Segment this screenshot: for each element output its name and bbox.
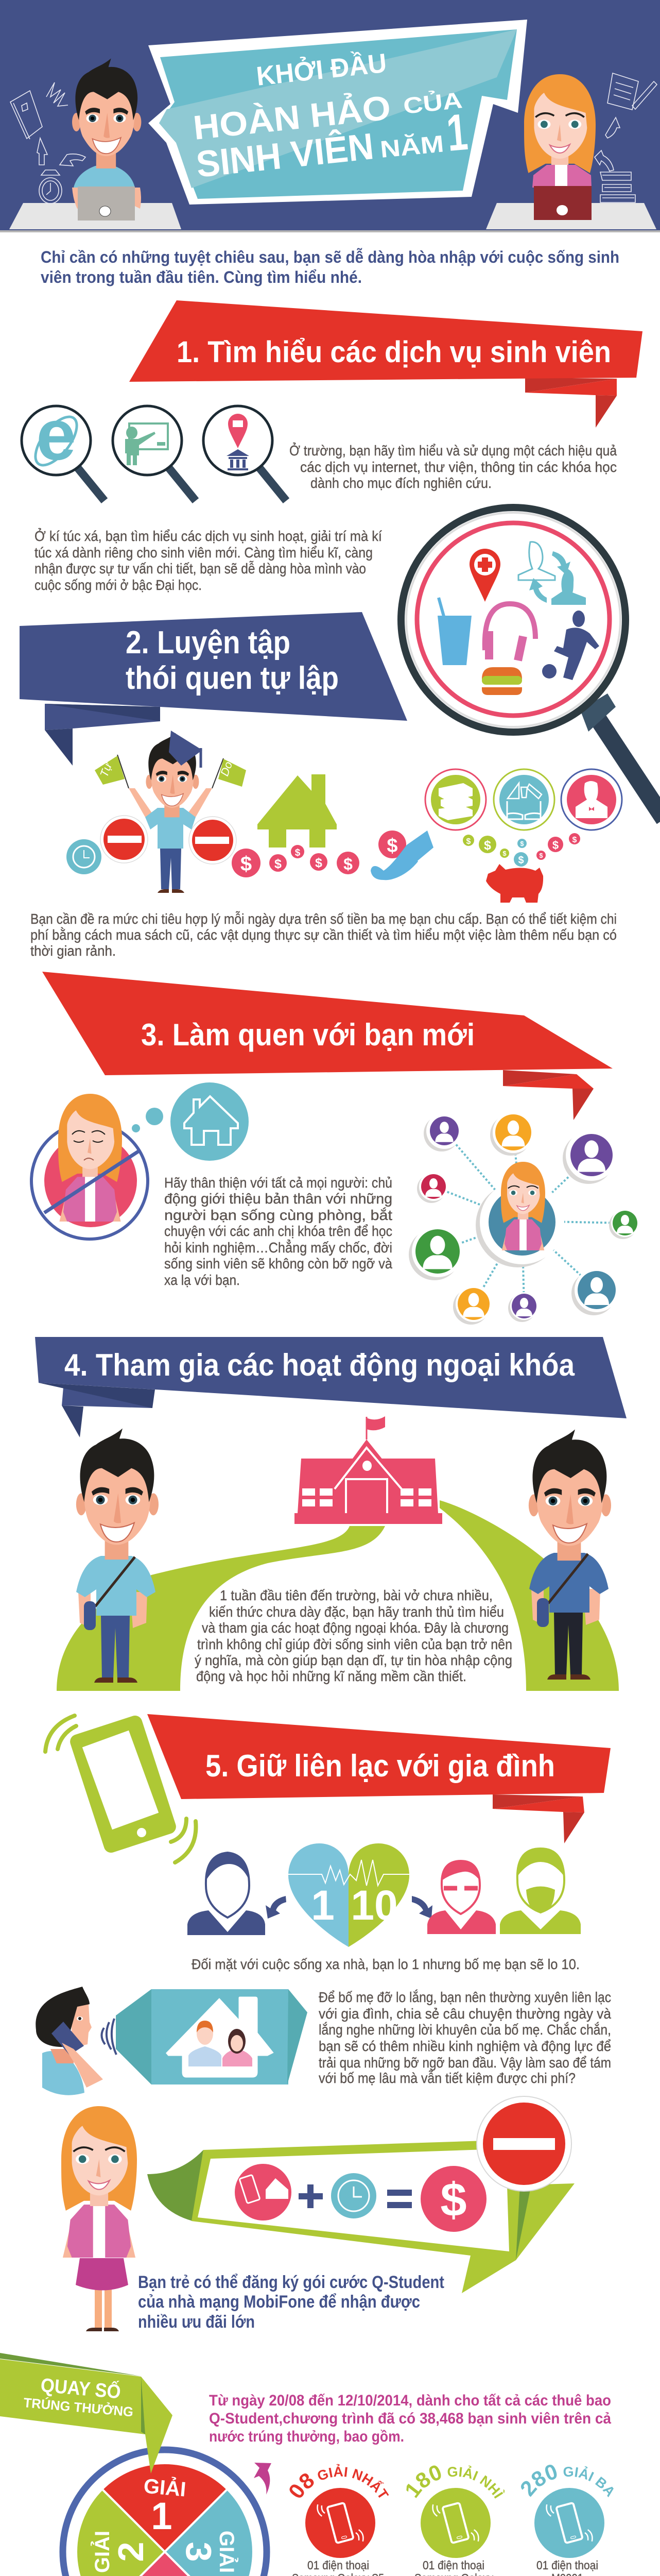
title text: CỦA	[402, 87, 463, 119]
section 2 text: thời gian rảnh.	[30, 943, 116, 959]
heart divided 1 and 10	[288, 1843, 409, 1947]
lucky draw text: Q-Student,chương trình đã có 38,468 bạn sinh viên trên cả	[209, 2410, 611, 2427]
section 1 text B: túc xá dành riêng cho sinh viên mới. Càng tìm hiểu kĩ, càng	[34, 545, 373, 561]
money trail: $	[343, 855, 353, 873]
section 1 text A	[289, 442, 617, 491]
wheel labels: GIẢI	[143, 2474, 187, 2501]
saving coins: $	[539, 852, 543, 859]
section 3 text: sống sinh viên sẽ không còn bỡ ngỡ và	[164, 1256, 392, 1272]
saving coins: $	[466, 837, 471, 846]
house icon	[257, 774, 337, 848]
section 5 advice text: Để bố mẹ đỡ lo lắng, bạn nên thường xuyên liên lạc	[319, 1989, 611, 2005]
section 3 text: Hãy thân thiện với tất cả mọi người: chủ	[164, 1175, 392, 1191]
magnifier icons row	[22, 394, 286, 501]
icon: study tools	[494, 769, 554, 830]
prize second: 180 GIẢI NHÌ	[406, 2466, 505, 2499]
section 3 text: xa lạ với bạn.	[164, 1272, 240, 1288]
figure: father	[500, 1849, 581, 1934]
no-entry sign	[477, 2096, 571, 2191]
section 1 text A: dành cho mục đích nghiên cứu.	[310, 475, 492, 491]
header panel	[0, 0, 660, 232]
figure: son	[187, 1853, 265, 1935]
doodles left	[10, 82, 85, 204]
heart divided 1 and 10: 1	[311, 1882, 335, 1929]
section 5 advice text: với gia đình, chia sẻ câu chuyện thường ngày và	[319, 2006, 611, 2022]
prize first: 08 GIẢI NHẤT	[289, 2464, 389, 2498]
school building	[294, 1416, 442, 1524]
no-entry signs	[100, 816, 236, 864]
banner 5: 5. Giữ liên lạc với gia đình	[205, 1749, 555, 1783]
icon: clock	[331, 2173, 376, 2218]
quay so banner: TRÚNG THƯỞNG	[23, 2394, 134, 2420]
flags: Do	[218, 760, 235, 778]
icon: medical pin	[470, 549, 500, 602]
banner 3: 3. Làm quen với bạn mới	[141, 1018, 475, 1052]
sad homesick woman	[31, 1094, 148, 1239]
prize wheel	[63, 2450, 267, 2576]
prize second: 01 điện thoại	[423, 2558, 484, 2572]
prize second	[406, 2466, 505, 2576]
lucky draw text: nước trúng thưởng, bao gồm.	[209, 2428, 404, 2445]
banner 2: 2. Luyện tập	[126, 625, 290, 660]
money trail: $	[315, 856, 322, 870]
wheel labels: GIẢI	[215, 2531, 239, 2573]
banner 4: 4. Tham gia các hoạt động ngoại khóa	[64, 1348, 575, 1382]
magnifier: internet	[22, 394, 105, 501]
sound waves	[101, 2019, 116, 2055]
wheel labels	[90, 2474, 239, 2576]
friend network	[409, 1112, 639, 1325]
heart divided 1 and 10: 10	[351, 1882, 398, 1929]
figure: mother	[427, 1861, 496, 1934]
section 4 text: trình không chỉ giúp đời sống sinh viên của bạn trở nên	[197, 1636, 512, 1652]
flags: Tự	[97, 760, 115, 779]
section 2 text	[30, 911, 617, 959]
Q-Student text: của nhà mạng MobiFone để nhận được	[138, 2292, 420, 2312]
green message callout	[147, 2096, 575, 2293]
banner 2: thói quen tự lập	[126, 660, 339, 696]
title text: HOÀN HẢO	[192, 88, 392, 147]
big magnifier	[401, 507, 660, 819]
Q-Student text: nhiều ưu đãi lớn	[138, 2312, 255, 2332]
expense circles	[425, 769, 622, 830]
section 4 text: ý nghĩa, mà còn giúp bạn dạn dĩ, tự tin hòa nhập cộng	[195, 1652, 512, 1668]
section 3 text: người bạn sống cùng phòng, bắt	[164, 1207, 392, 1223]
saving coins: $	[518, 855, 524, 866]
section 3 text: chuyện với các anh chị khóa trên để học	[164, 1223, 392, 1239]
wheel labels: 2	[111, 2542, 151, 2562]
intro text	[41, 248, 619, 286]
magnifier: lecture	[113, 406, 196, 501]
Q-Student text	[138, 2273, 444, 2332]
wheel labels: 1	[151, 2495, 172, 2537]
lucky draw text	[209, 2392, 611, 2445]
section 3 text: hỏi kinh nghiệm…Chẳng mấy chốc, đời	[164, 1239, 392, 1256]
title text: NĂM	[379, 130, 445, 163]
title text: KHỞI ĐẦU	[255, 48, 388, 92]
title text: SINH VIÊN	[194, 125, 376, 185]
section 4 text: động và học hỏi những kĩ năng mềm cần thiết.	[196, 1668, 466, 1684]
magnifier: library	[203, 406, 286, 501]
section 4 text	[195, 1587, 512, 1684]
sad face	[72, 1131, 105, 1160]
section 1 text B: Ở kí túc xá, bạn tìm hiểu các dịch vụ sinh hoạt, giải trí mà kí	[34, 528, 382, 544]
intro text: viên trong tuần đầu tiên. Cùng tìm hiểu nhé.	[41, 268, 362, 286]
right desk	[486, 203, 656, 229]
thought bubble: home	[132, 1082, 249, 1161]
magnifier: internet: e	[36, 394, 76, 475]
section 5 advice text: trải qua những bỡ ngỡ ban đầu. Vậy làm sao để tám	[319, 2055, 611, 2071]
left desk	[9, 203, 181, 229]
section 1 text A: Ở trường, bạn hãy tìm hiểu và sử dụng một cách hiệu quả	[289, 442, 617, 459]
banner 1: 1. Tìm hiểu các dịch vụ sinh viên	[177, 335, 611, 369]
icon: drink	[438, 598, 472, 665]
student left	[76, 1429, 159, 1683]
banner 5	[147, 1714, 611, 1843]
money trail	[232, 831, 406, 877]
section 1 text A: các dịch vụ internet, thư viện, thông tin các khóa học	[300, 459, 617, 475]
section 5 advice text: bạn sẽ có thêm nhiều kinh nghiệm và động lực để	[319, 2038, 611, 2054]
prize first	[289, 2464, 389, 2576]
mother figure	[222, 2029, 252, 2066]
section 4 text: 1 tuần đầu tiên đến trường, bài vở chưa nhiều,	[220, 1587, 493, 1603]
icon: headphones	[485, 604, 535, 660]
money trail: $	[295, 848, 301, 858]
banner 1	[129, 300, 642, 428]
title bubble	[148, 20, 527, 205]
section 5 advice text	[319, 1989, 611, 2086]
money trail: $	[240, 853, 252, 875]
prize third: 01 điện thoại	[536, 2558, 598, 2572]
ringing phone	[45, 1714, 196, 1862]
section 3 text	[164, 1175, 392, 1288]
green roads	[57, 1500, 619, 1691]
wheel arrows	[48, 2463, 271, 2576]
man with laptop	[72, 58, 141, 221]
section 5 advice text: lắng nghe những lời khuyên của bố mẹ. Chắc chắn,	[319, 2022, 611, 2038]
family worry diagram	[187, 1843, 581, 1947]
giving hand	[371, 831, 433, 880]
woman with laptop	[524, 74, 596, 220]
Q-Student text: Bạn trẻ có thể đăng ký gói cước Q-Student	[138, 2273, 444, 2292]
title text: 1	[444, 103, 470, 162]
graduation cap	[169, 731, 202, 766]
icon: dollar: $	[440, 2174, 467, 2226]
saving coins: $	[484, 838, 491, 853]
money trail: $	[387, 835, 398, 857]
saving coins: $	[502, 850, 507, 857]
friend nodes	[409, 1112, 639, 1325]
doodles right	[595, 73, 657, 202]
prize third	[521, 2465, 614, 2576]
section 4 text: kiến thức chưa dày đặc, bạn hãy tranh thủ tìm hiểu	[209, 1604, 504, 1620]
parents house callout	[116, 1989, 307, 2084]
prize third: 280 GIẢI BA	[521, 2465, 614, 2498]
student right	[529, 1430, 611, 1680]
saving coins: $	[520, 840, 524, 848]
section 1 text B: cuộc sống mới ở bậc Đại học.	[34, 577, 202, 593]
icon: waiter job	[561, 769, 622, 830]
section 3 text: động giới thiệu bản thân với những	[164, 1191, 392, 1207]
section 1 text B	[34, 528, 382, 593]
icon: people exchange	[518, 542, 586, 605]
father figure	[188, 2021, 221, 2066]
title text	[192, 48, 470, 185]
prize first: 01 điện thoại	[307, 2558, 369, 2572]
intro text: Chỉ cần có những tuyệt chiêu sau, bạn sẽ dễ dàng hòa nhập với cuộc sống sinh	[41, 248, 619, 266]
section 1 text B: nhận được sự tư vấn chi tiết, bạn sẽ dễ dàng hòa mình vào	[34, 561, 366, 577]
equals sign	[387, 2190, 412, 2208]
saving coins: $	[572, 836, 577, 844]
banner 4	[35, 1337, 627, 1437]
piggy bank	[486, 864, 543, 903]
saving coins: $	[552, 839, 559, 852]
icon: dollar	[421, 2166, 487, 2232]
lucky draw text: Từ ngày 20/08 đến 12/10/2014, dành cho tất cả các thuê bao	[209, 2392, 611, 2409]
wheel labels: GIẢI	[90, 2531, 114, 2573]
arrows	[266, 1896, 286, 1919]
plus sign	[299, 2184, 323, 2208]
quay so banner	[0, 2353, 172, 2473]
wheel labels: 3	[179, 2542, 219, 2562]
section 5 worry line: Đối mặt với cuộc sống xa nhà, bạn lo 1 nhưng bố mẹ bạn sẽ lo 10.	[192, 1956, 580, 1972]
central woman	[476, 1162, 564, 1267]
man with flags	[95, 731, 246, 893]
banner 2	[20, 612, 407, 766]
icon: call home	[235, 2164, 291, 2221]
section 5 advice text: với bố mẹ lâu mà vẫn tiết kiệm được chi phí?	[319, 2070, 576, 2086]
man on the phone	[36, 1987, 103, 2095]
equation icons	[235, 2164, 487, 2232]
banner 3	[42, 972, 613, 1120]
flags	[95, 755, 246, 788]
icon: footballer	[542, 611, 599, 680]
woman full figure	[61, 2106, 137, 2331]
icon: books	[425, 769, 486, 830]
icon: burger	[482, 667, 522, 695]
alarm clock	[66, 839, 101, 874]
saving coins	[463, 833, 580, 867]
quay so banner: QUAY SỐ	[40, 2373, 122, 2403]
section 4 text: và tham gia các hoạt động ngoại khóa. Đây là chương	[202, 1620, 509, 1636]
money trail: $	[274, 857, 282, 871]
